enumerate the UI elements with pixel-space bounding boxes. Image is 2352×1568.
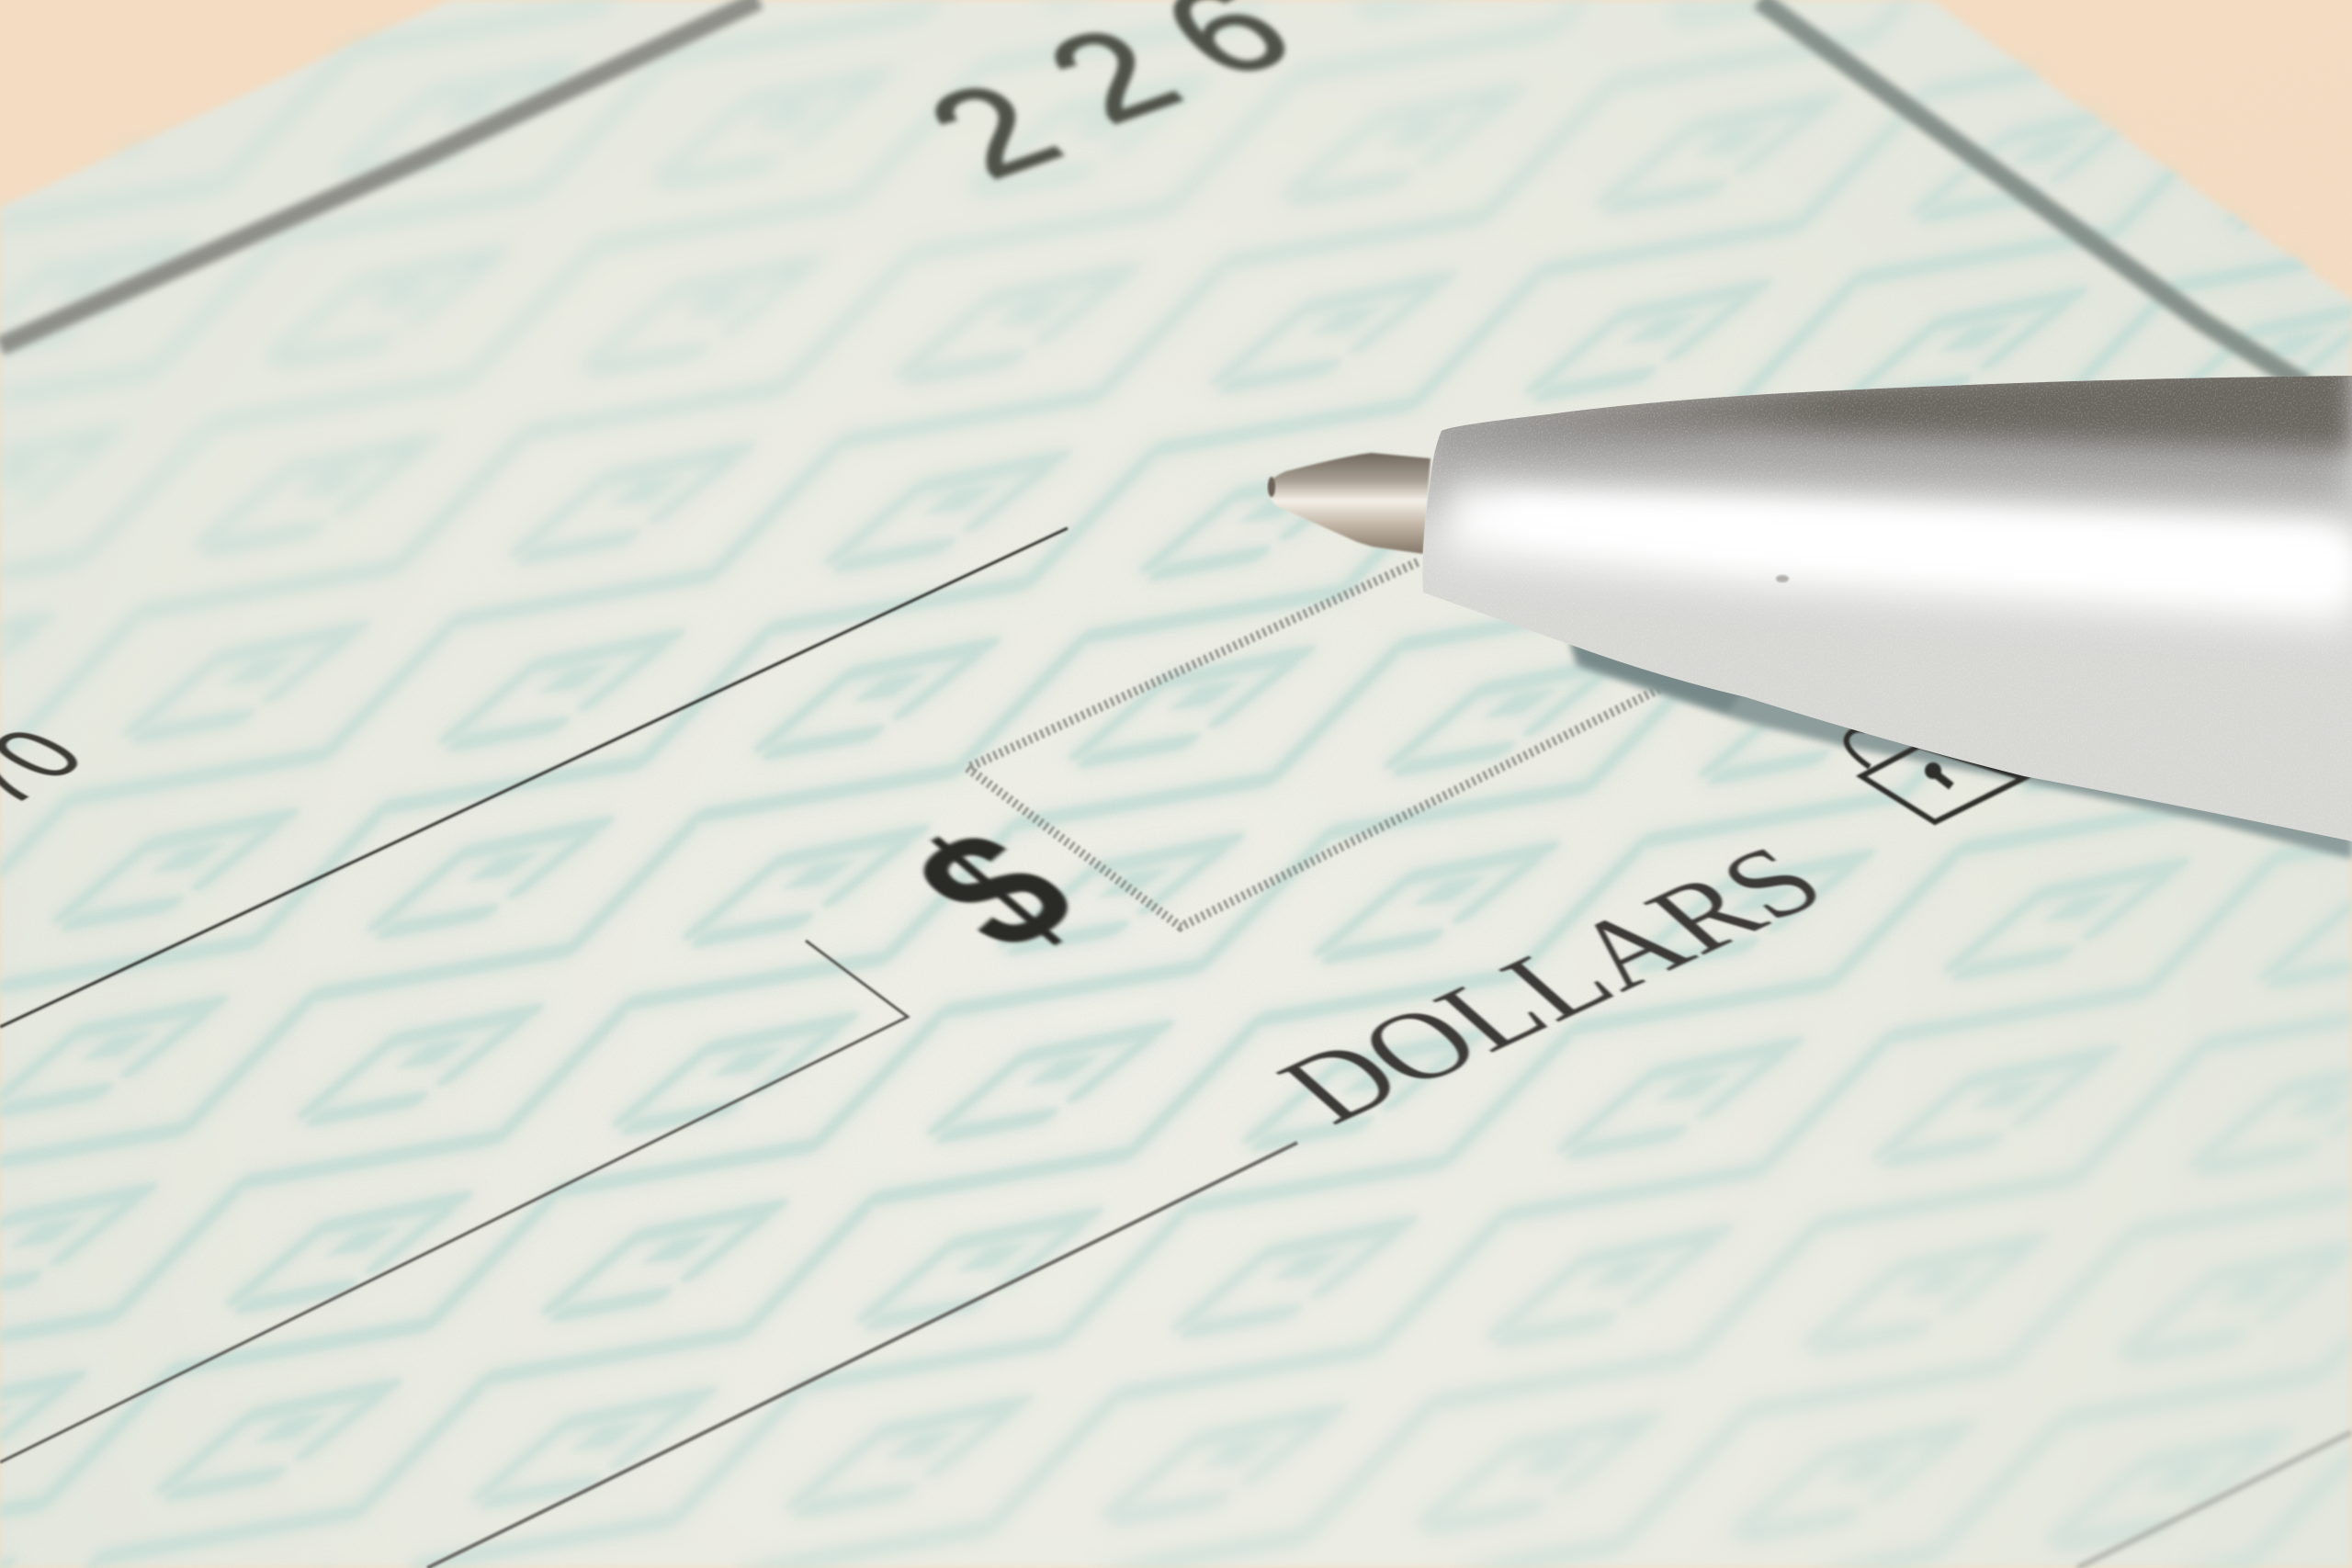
nib ball tip <box>1268 477 1275 497</box>
barrel mid grey <box>1426 376 2352 532</box>
barrel base metal <box>1406 358 2352 854</box>
security border: right microprint rail <box>1759 0 2306 386</box>
barrel highlight core <box>1507 501 2352 597</box>
amount line <box>427 1143 1297 1568</box>
pen barrel <box>1406 354 2352 854</box>
check number 226: 2 <box>894 58 1093 204</box>
barrel dark top band <box>1433 354 2352 450</box>
pen nib <box>1268 453 1430 554</box>
pen shadow <box>1569 638 2352 859</box>
dotted amount box <box>967 562 1672 927</box>
pay-to line <box>0 528 1068 1027</box>
dollar sign: $ <box>868 795 1120 985</box>
faint signature line <box>2077 1432 2352 1568</box>
icon: padlock security mark <box>1847 729 2024 822</box>
DOLLARS label: DOLLARS <box>1252 826 1852 1144</box>
check number 226: 2 <box>1013 3 1213 149</box>
payee bracket line <box>0 941 908 1462</box>
check number 226 <box>894 0 1327 204</box>
security border: left microprint rail <box>0 0 759 346</box>
barrel specular highlight <box>1447 482 2352 625</box>
barrel scuff mark <box>1776 575 1789 582</box>
barrel metallic sparkle <box>1406 358 2352 854</box>
